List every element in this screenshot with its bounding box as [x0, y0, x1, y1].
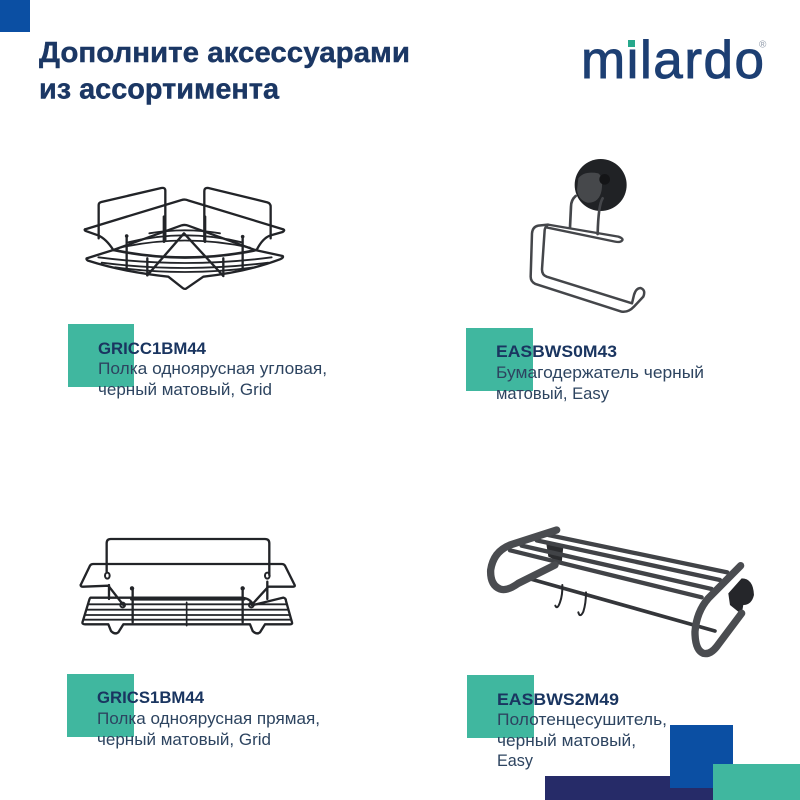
label swatch 2 [466, 328, 533, 391]
product 4 text: Easy [497, 751, 533, 770]
suction cup [575, 159, 627, 211]
title [39, 37, 410, 106]
product 3 text: GRICS1BM44 [97, 688, 205, 707]
product 1 text [98, 339, 327, 399]
product 3 text [97, 688, 320, 749]
label swatch 4 [467, 675, 534, 738]
product 2 text [496, 342, 704, 403]
label swatch 3 [67, 674, 134, 737]
product 4 text [497, 690, 667, 770]
product 2 text: матовый, Easy [496, 384, 609, 403]
logo: milardo: milardo [581, 31, 764, 90]
product 1: corner shelf image [85, 188, 284, 289]
product 4 text: EASBWS2M49 [497, 690, 619, 709]
product 4 text: черный матовый, [497, 731, 636, 750]
product 4: towel rack image [491, 530, 754, 654]
product 1 text: GRICC1BM44 [98, 339, 207, 358]
product 4 text: Полотенцесушитель, [497, 710, 667, 729]
product 3: straight shelf image [81, 539, 295, 633]
decorative corner blocks [545, 725, 800, 800]
title: из ассортимента [39, 74, 280, 106]
product 1 text: Полка одноярусная угловая, [98, 359, 327, 378]
label swatch 1 [68, 324, 134, 387]
product 2: toilet paper holder image [531, 159, 644, 312]
product 3 text: черный матовый, Grid [97, 730, 271, 749]
product 3 text: Полка одноярусная прямая, [97, 709, 320, 728]
product 2 text: EASBWS0M43 [496, 342, 617, 361]
decorative corner square [0, 0, 30, 32]
product 2 text: Бумагодержатель черный [496, 363, 704, 382]
title: Дополните аксессуарами [39, 37, 410, 69]
logo: milardo: ® [759, 40, 767, 50]
wall mounts [546, 542, 754, 614]
product 1 text: черный матовый, Grid [98, 380, 272, 399]
